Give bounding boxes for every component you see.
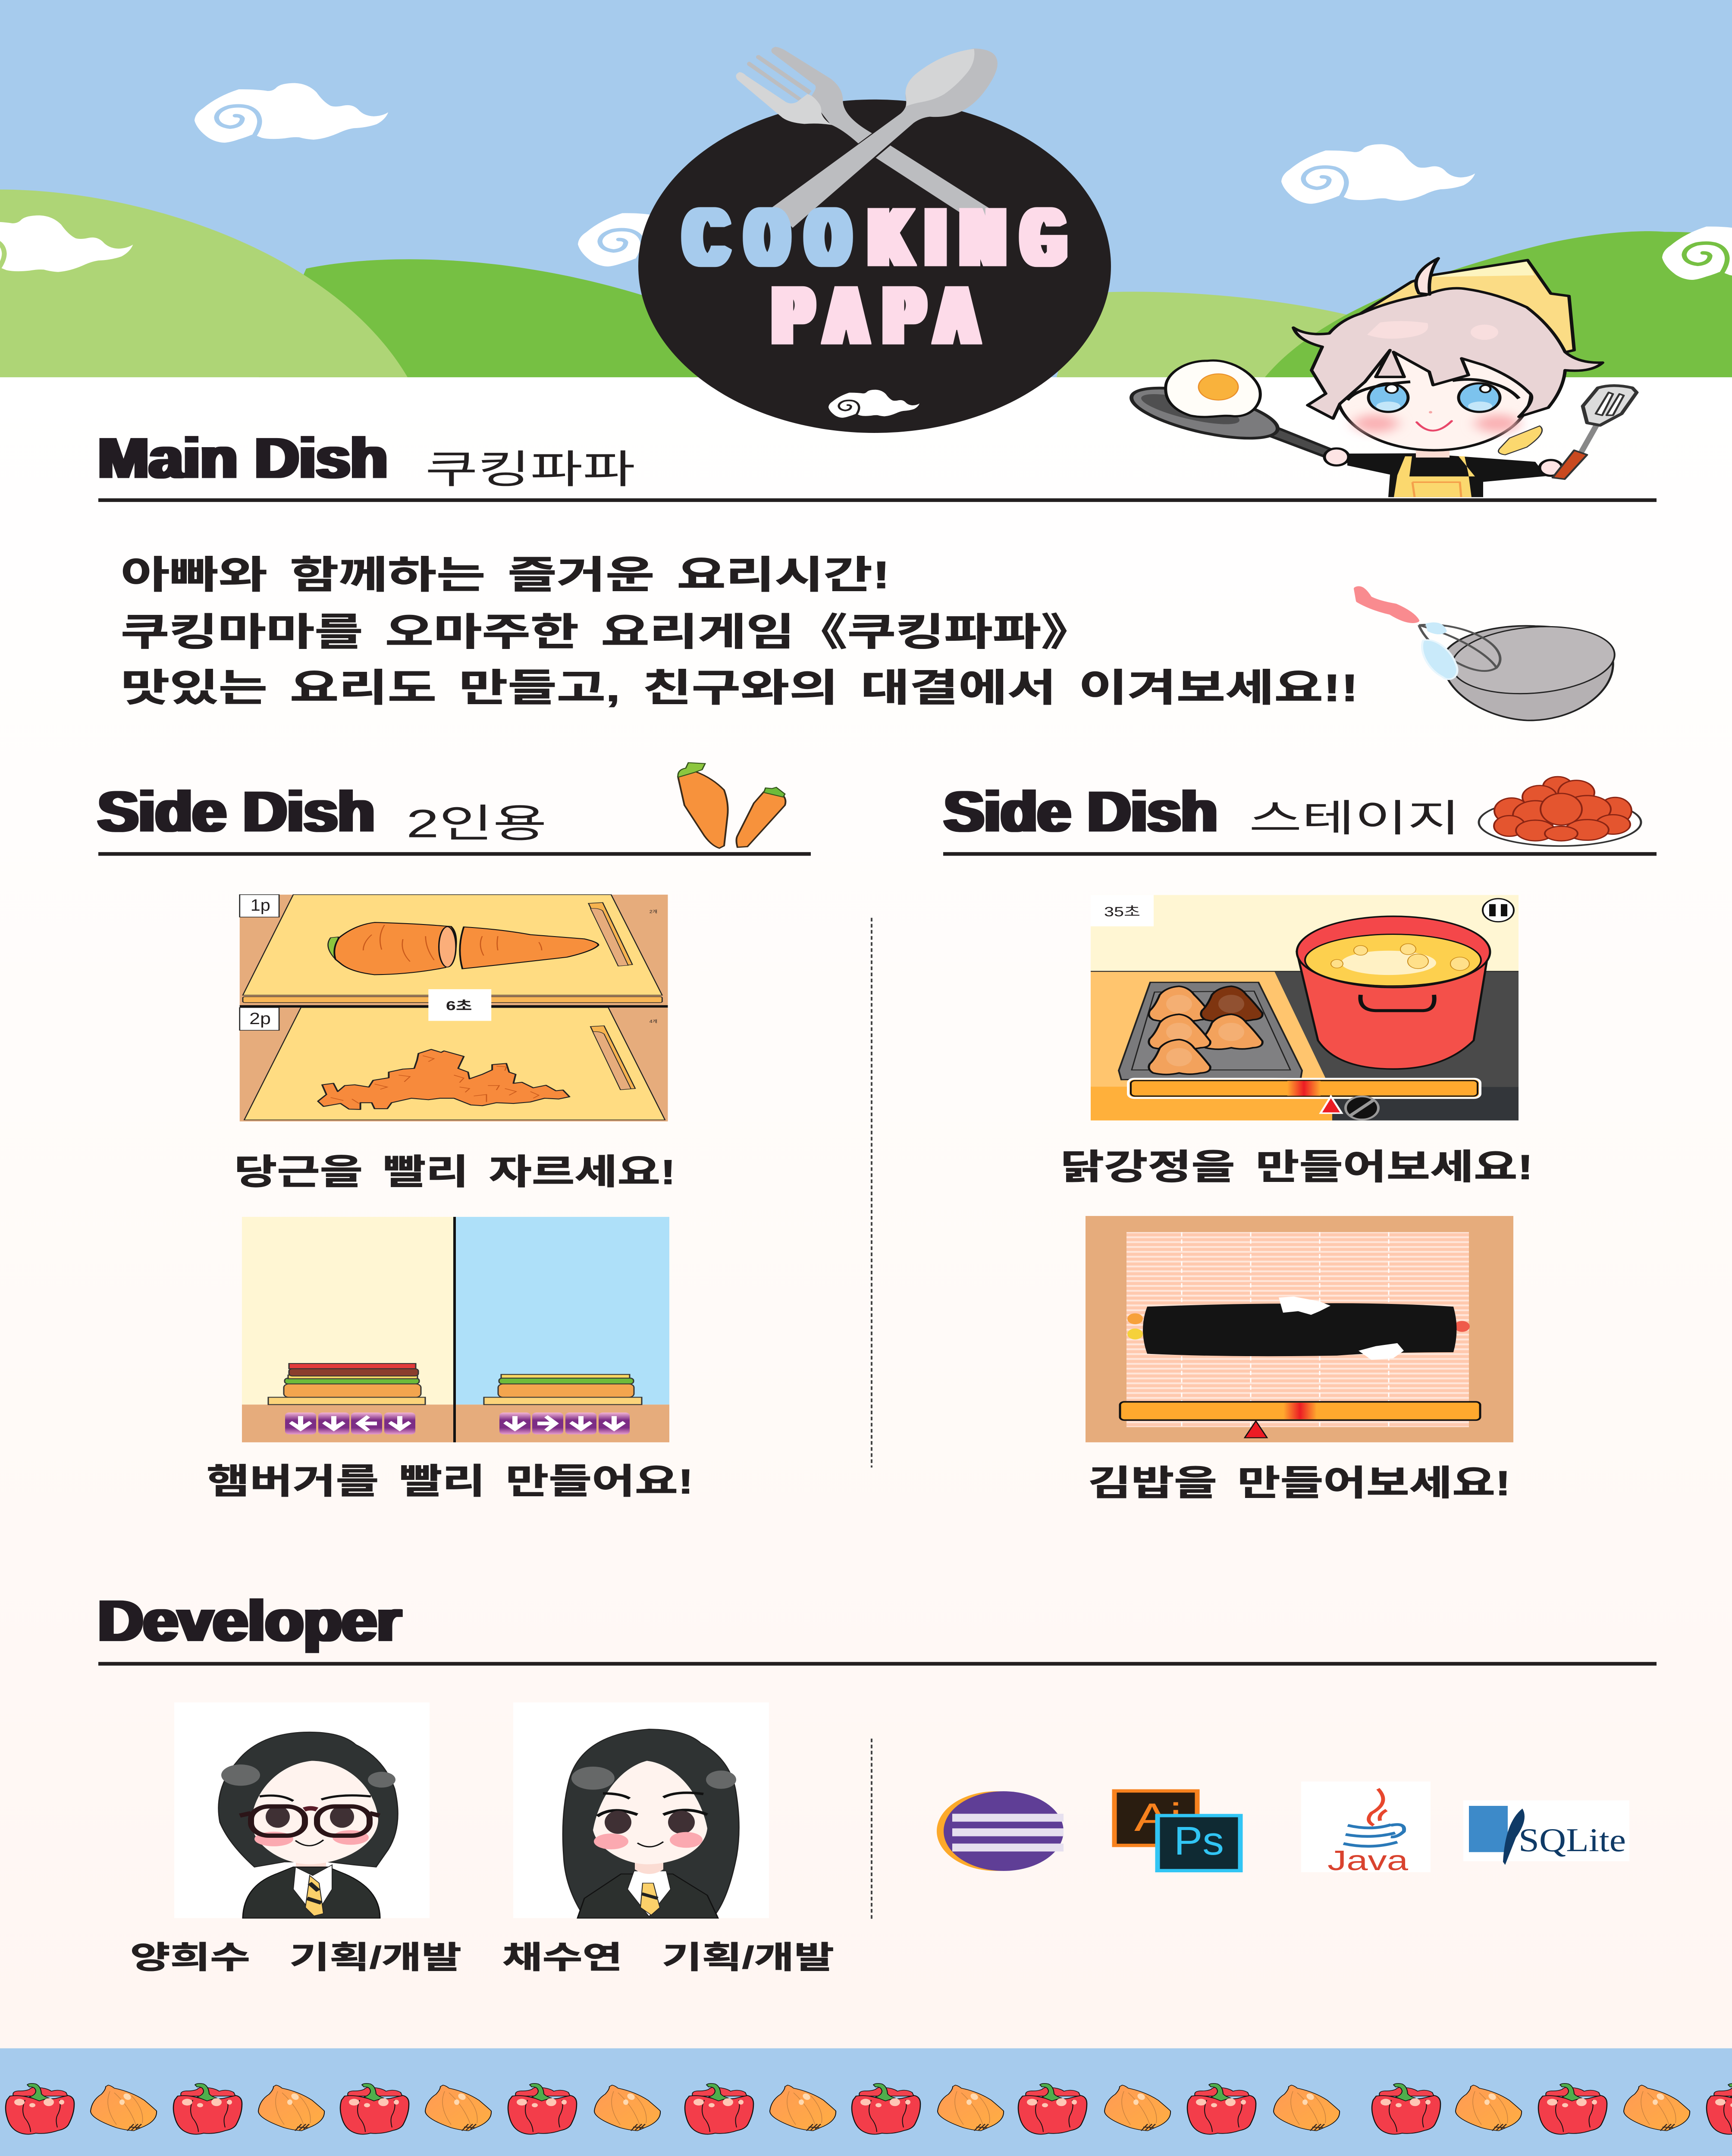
name: developer 2: 채수연 기획/개발: [502, 1940, 834, 1975]
heading: Main Dish: [98, 426, 635, 492]
avatar: developer 1 with glasses: [174, 1702, 430, 1918]
icon: java logo: Java: [1327, 1845, 1409, 1876]
title: C: [686, 191, 726, 283]
pot: [1297, 916, 1490, 1069]
icon: fried egg: [1166, 360, 1260, 417]
timing bar: [1128, 1079, 1480, 1119]
icon: spatula: [1553, 385, 1637, 479]
footer band: [0, 2048, 1732, 2156]
eyes: [1347, 379, 1519, 412]
name: developer 1: 양희수 기획/개발: [130, 1940, 461, 1975]
jacket: [243, 1867, 380, 1918]
intro text block: 아빠와 함께하는 즐거운 요리시간!: [121, 554, 890, 596]
icon: plate of chicken: [1479, 777, 1641, 846]
title: K: [871, 191, 911, 283]
mouth: [1417, 421, 1452, 431]
icon: frying pan: [1123, 378, 1333, 456]
cloud behind logo: [578, 207, 772, 266]
carrot pieces: [328, 922, 599, 975]
heading: Developer: Developer: [98, 1588, 401, 1653]
peppers and onions row: [6, 2084, 1732, 2134]
heading: Side Dish 스테이지: 스테이지: [1249, 797, 1460, 840]
heading: Side Dish 2인용: Side Dish: [98, 780, 375, 843]
hands: [1324, 448, 1349, 465]
icon: eclipse logo: [937, 1791, 1064, 1871]
title: A: [937, 269, 977, 361]
title: P: [885, 269, 922, 361]
tray: [1119, 982, 1302, 1080]
icon: illustrator logo: [1114, 1791, 1197, 1846]
icon: illustrator logo: Ai: [1134, 1795, 1182, 1839]
icon: photoshop logo: [1158, 1816, 1240, 1871]
subtitle: 쿠킹파파: [425, 447, 635, 492]
heading: Side Dish 스테이지: Side Dish: [944, 780, 1217, 843]
game screenshot: chicken pot: [1091, 895, 1519, 1120]
cloud top left: [195, 83, 388, 143]
caption: 당근을 빨리 자르세요!: [234, 1153, 676, 1192]
icon: small cloud in logo: [828, 390, 919, 418]
avatar: developer 2 with long hair: [513, 1702, 769, 1918]
burger right: [484, 1375, 642, 1404]
cloud far left: [0, 216, 133, 275]
logo circle: [638, 100, 1111, 433]
intro text block: [121, 554, 1359, 710]
title: O: [808, 191, 848, 283]
caption: 김밥을 만들어보세요!: [1088, 1464, 1511, 1503]
game screenshot: carrot chopping: 4개: [650, 1019, 657, 1024]
arrow tiles left: [285, 1413, 415, 1435]
title: A: [826, 269, 866, 361]
ahoge: [1416, 258, 1438, 295]
game screenshot: carrot chopping: 2p: [249, 1009, 271, 1028]
apron: [1394, 456, 1475, 497]
game screenshot: carrot chopping: [240, 895, 668, 1122]
text: G: [1023, 191, 1064, 283]
game screenshot: carrot chopping: 6초: [446, 999, 472, 1013]
face: [1337, 335, 1531, 450]
glasses: [240, 1806, 380, 1836]
icon: hair bow: [1498, 426, 1542, 455]
icon: java logo: [1301, 1782, 1431, 1876]
fried chicken pieces: [1149, 986, 1262, 1075]
burger left: [268, 1363, 425, 1404]
game screenshot: carrot chopping: 2개: [650, 909, 657, 914]
title: [686, 191, 1064, 361]
timing bar: [1120, 1402, 1480, 1438]
game screenshot: chicken pot: 35초: [1104, 905, 1140, 919]
title: O: [748, 191, 787, 283]
heading: Main Dish: Main Dish: [98, 426, 388, 490]
player badges: [240, 895, 279, 917]
neck: [1416, 447, 1450, 458]
heading: Side Dish 2인용: 2인용: [406, 801, 547, 846]
sky and hills header: [0, 0, 1732, 377]
game screenshot: kimbap rolling: [1086, 1216, 1513, 1442]
icon: spoon: [772, 48, 998, 228]
facial features: [260, 1796, 371, 1801]
panel: side dish stage: [943, 777, 1657, 1503]
kimbap roll: [1127, 1297, 1470, 1360]
title: I: [927, 191, 944, 283]
blush: [1353, 414, 1398, 432]
icon: fork: [736, 47, 991, 229]
arms and body: [1347, 453, 1546, 497]
intro text block: 쿠킹마마를 오마주한 요리게임《쿠킹파파》: [121, 611, 1094, 654]
intro text block: 맛있는 요리도 만들고, 친구와의 대결에서 이겨보세요!!: [121, 667, 1359, 710]
game screenshot: carrot chopping: 1p: [251, 896, 270, 915]
character: chef boy with pan and spatula: [1123, 258, 1637, 497]
cloud top right: [1281, 144, 1475, 204]
facial features: [603, 1793, 703, 1799]
icon: carrots: [678, 763, 785, 848]
icon: sqlite logo: [1463, 1800, 1629, 1865]
panel: side dish 2 player: [98, 763, 811, 1501]
caption: 닭강정을 만들어보세요!: [1061, 1148, 1533, 1187]
hair: [1293, 288, 1603, 419]
icon: photoshop logo: Ps: [1174, 1819, 1224, 1863]
timer badge: [1091, 895, 1154, 926]
game screenshot: burger race: [242, 1217, 669, 1442]
arrow tiles right: [499, 1413, 630, 1435]
icon: sqlite logo: SQLite: [1519, 1821, 1626, 1858]
pause button: [1483, 899, 1514, 922]
cloud far right: [1662, 220, 1732, 280]
icon: mixing bowl with whisk: [1356, 588, 1621, 721]
chopped carrot pile: [318, 1050, 570, 1109]
caption: 햄버거를 빨리 만들어요!: [207, 1462, 693, 1501]
title: P: [775, 269, 811, 361]
title: N: [962, 191, 1003, 283]
icon: hat: [1337, 260, 1574, 365]
